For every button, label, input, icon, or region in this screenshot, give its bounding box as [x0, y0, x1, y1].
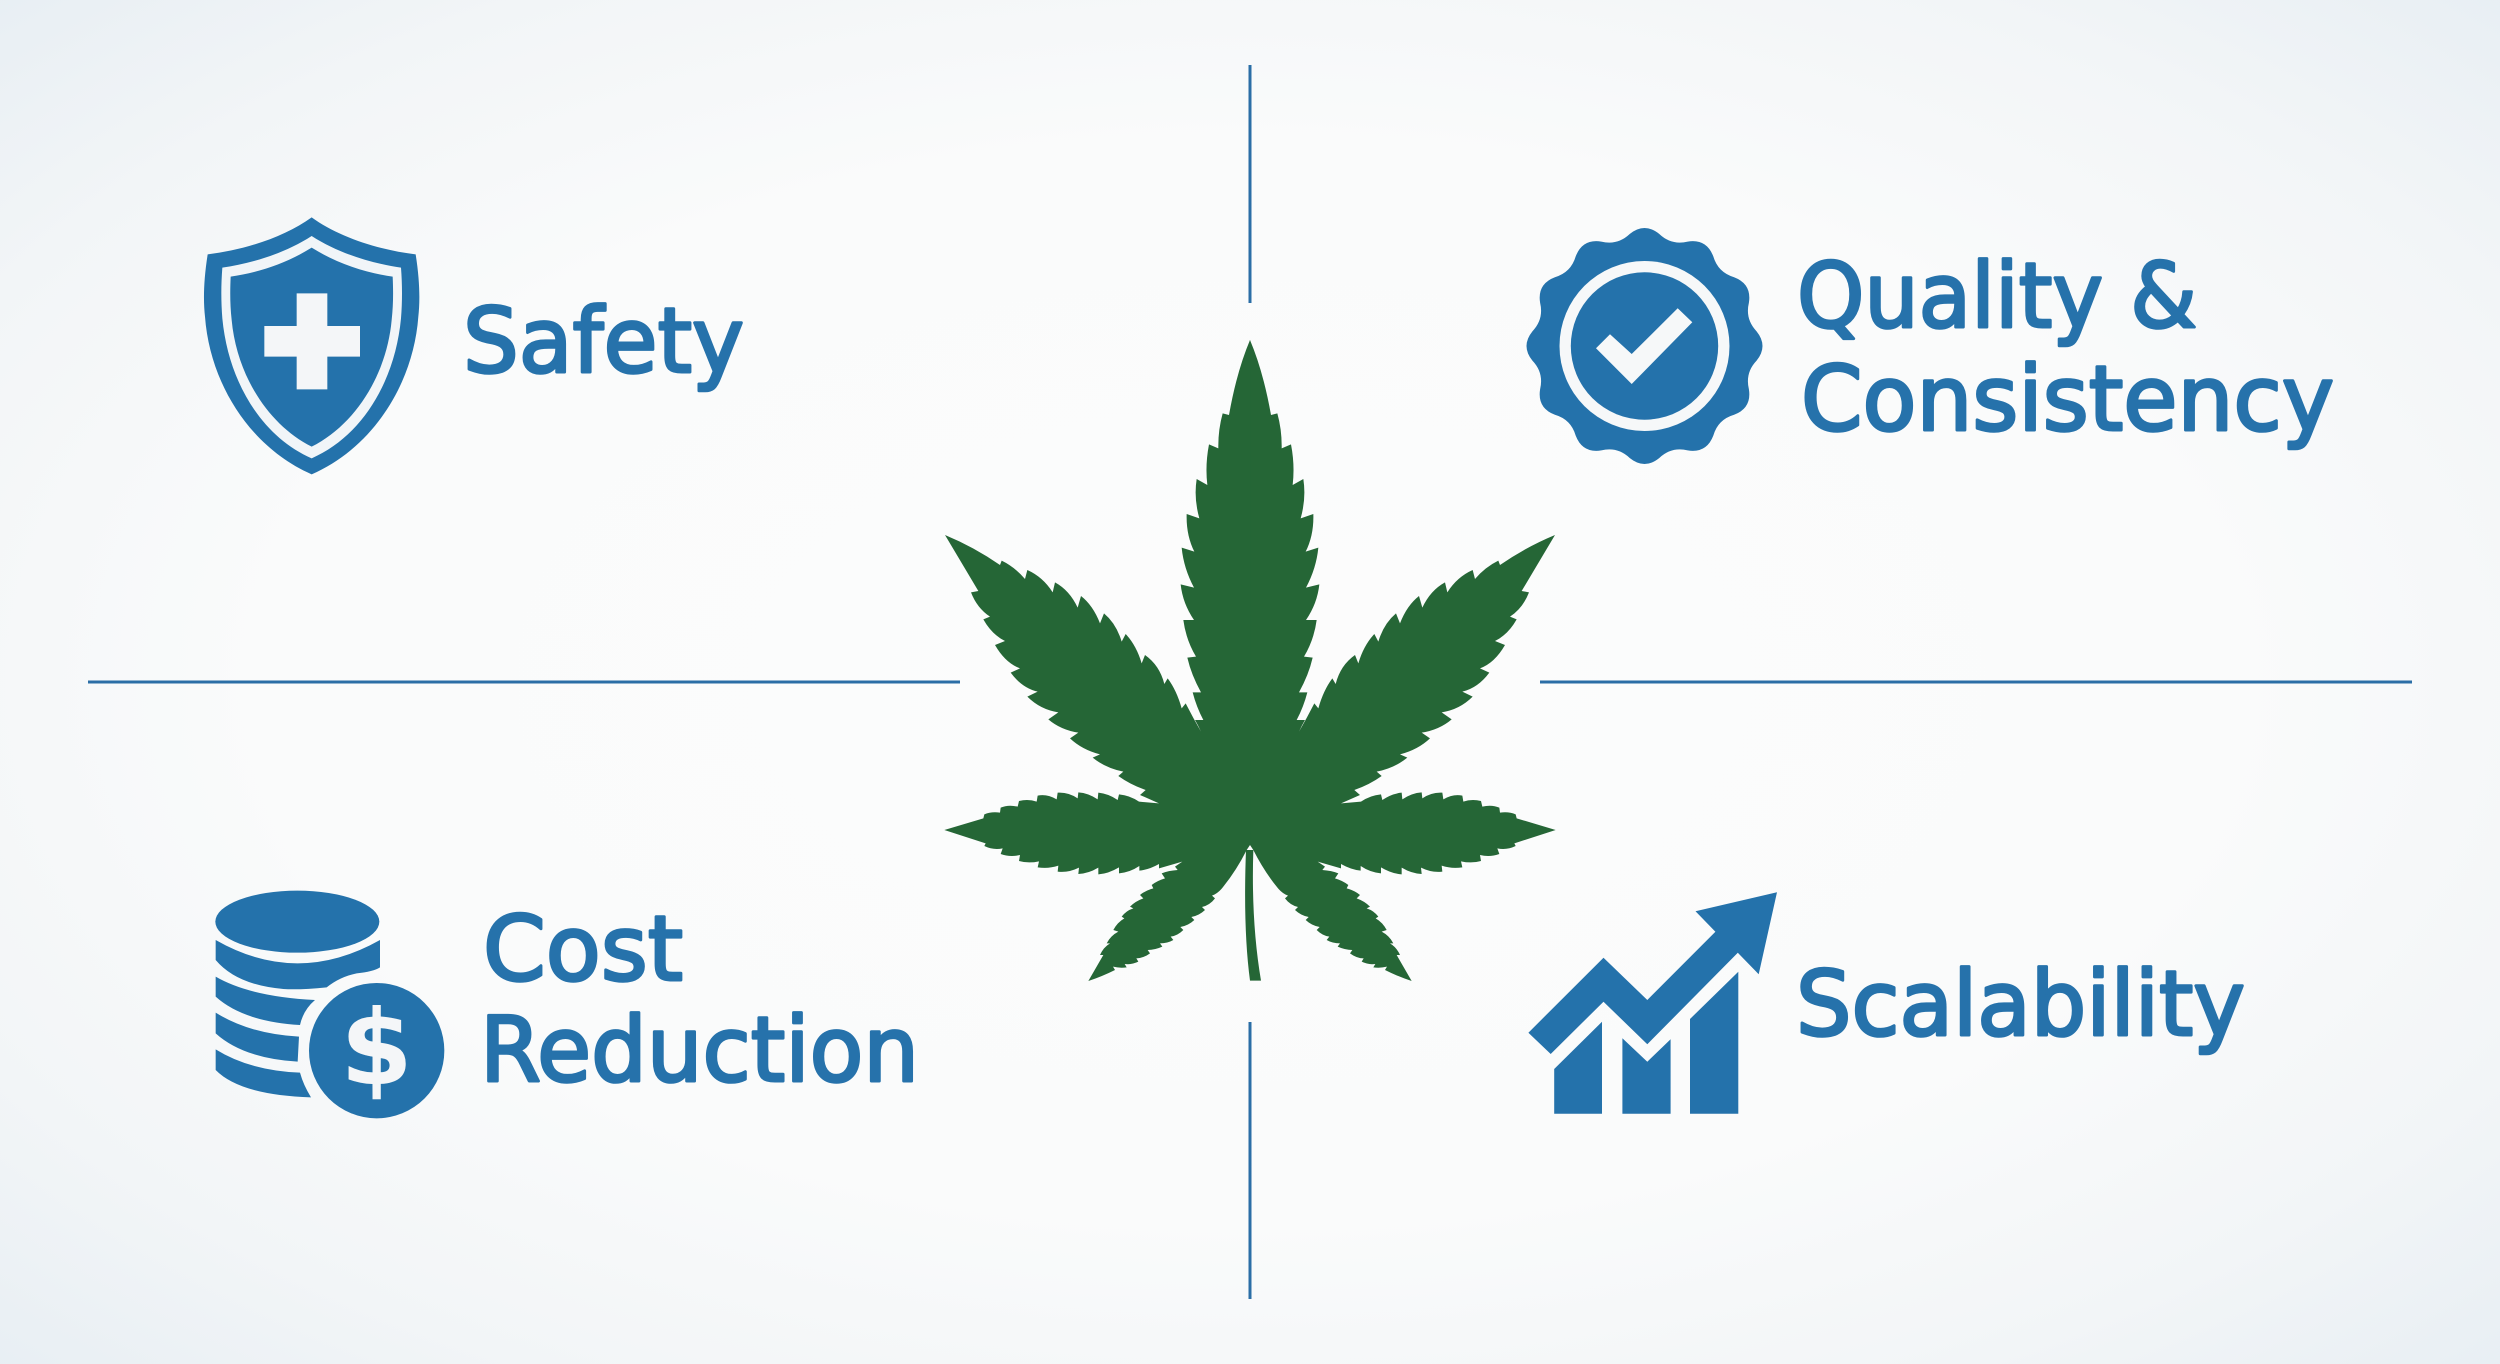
icon: scalloped badge with check: [1526, 228, 1762, 464]
icon: central cannabis leaf: [944, 340, 1556, 981]
panel: safety: [204, 217, 744, 474]
label: Cost: Cost: [483, 897, 683, 1002]
icon: shield with cross: [204, 217, 419, 474]
panel: quality and consistency: [1526, 228, 2334, 464]
label: Safety: Safety: [463, 289, 744, 394]
label: Reduction: Reduction: [480, 998, 919, 1103]
panel: cost reduction: [215, 891, 919, 1118]
icon: rising arrow and bars: [1528, 892, 1777, 1114]
divider: top vertical line: [1248, 65, 1252, 303]
panel: scalability: [1528, 892, 2245, 1114]
label: Scalability: Scalability: [1796, 952, 2245, 1057]
divider: right horizontal line: [1540, 680, 2412, 684]
icon: coin stack with dollar coin: $: [340, 987, 413, 1109]
icon: coin stack with dollar coin: [215, 891, 444, 1118]
divider: bottom vertical line: [1248, 1022, 1252, 1299]
divider: left horizontal line: [88, 680, 960, 684]
label: Quality &: Quality &: [1797, 244, 2197, 349]
label: Consistency: Consistency: [1801, 347, 2334, 452]
